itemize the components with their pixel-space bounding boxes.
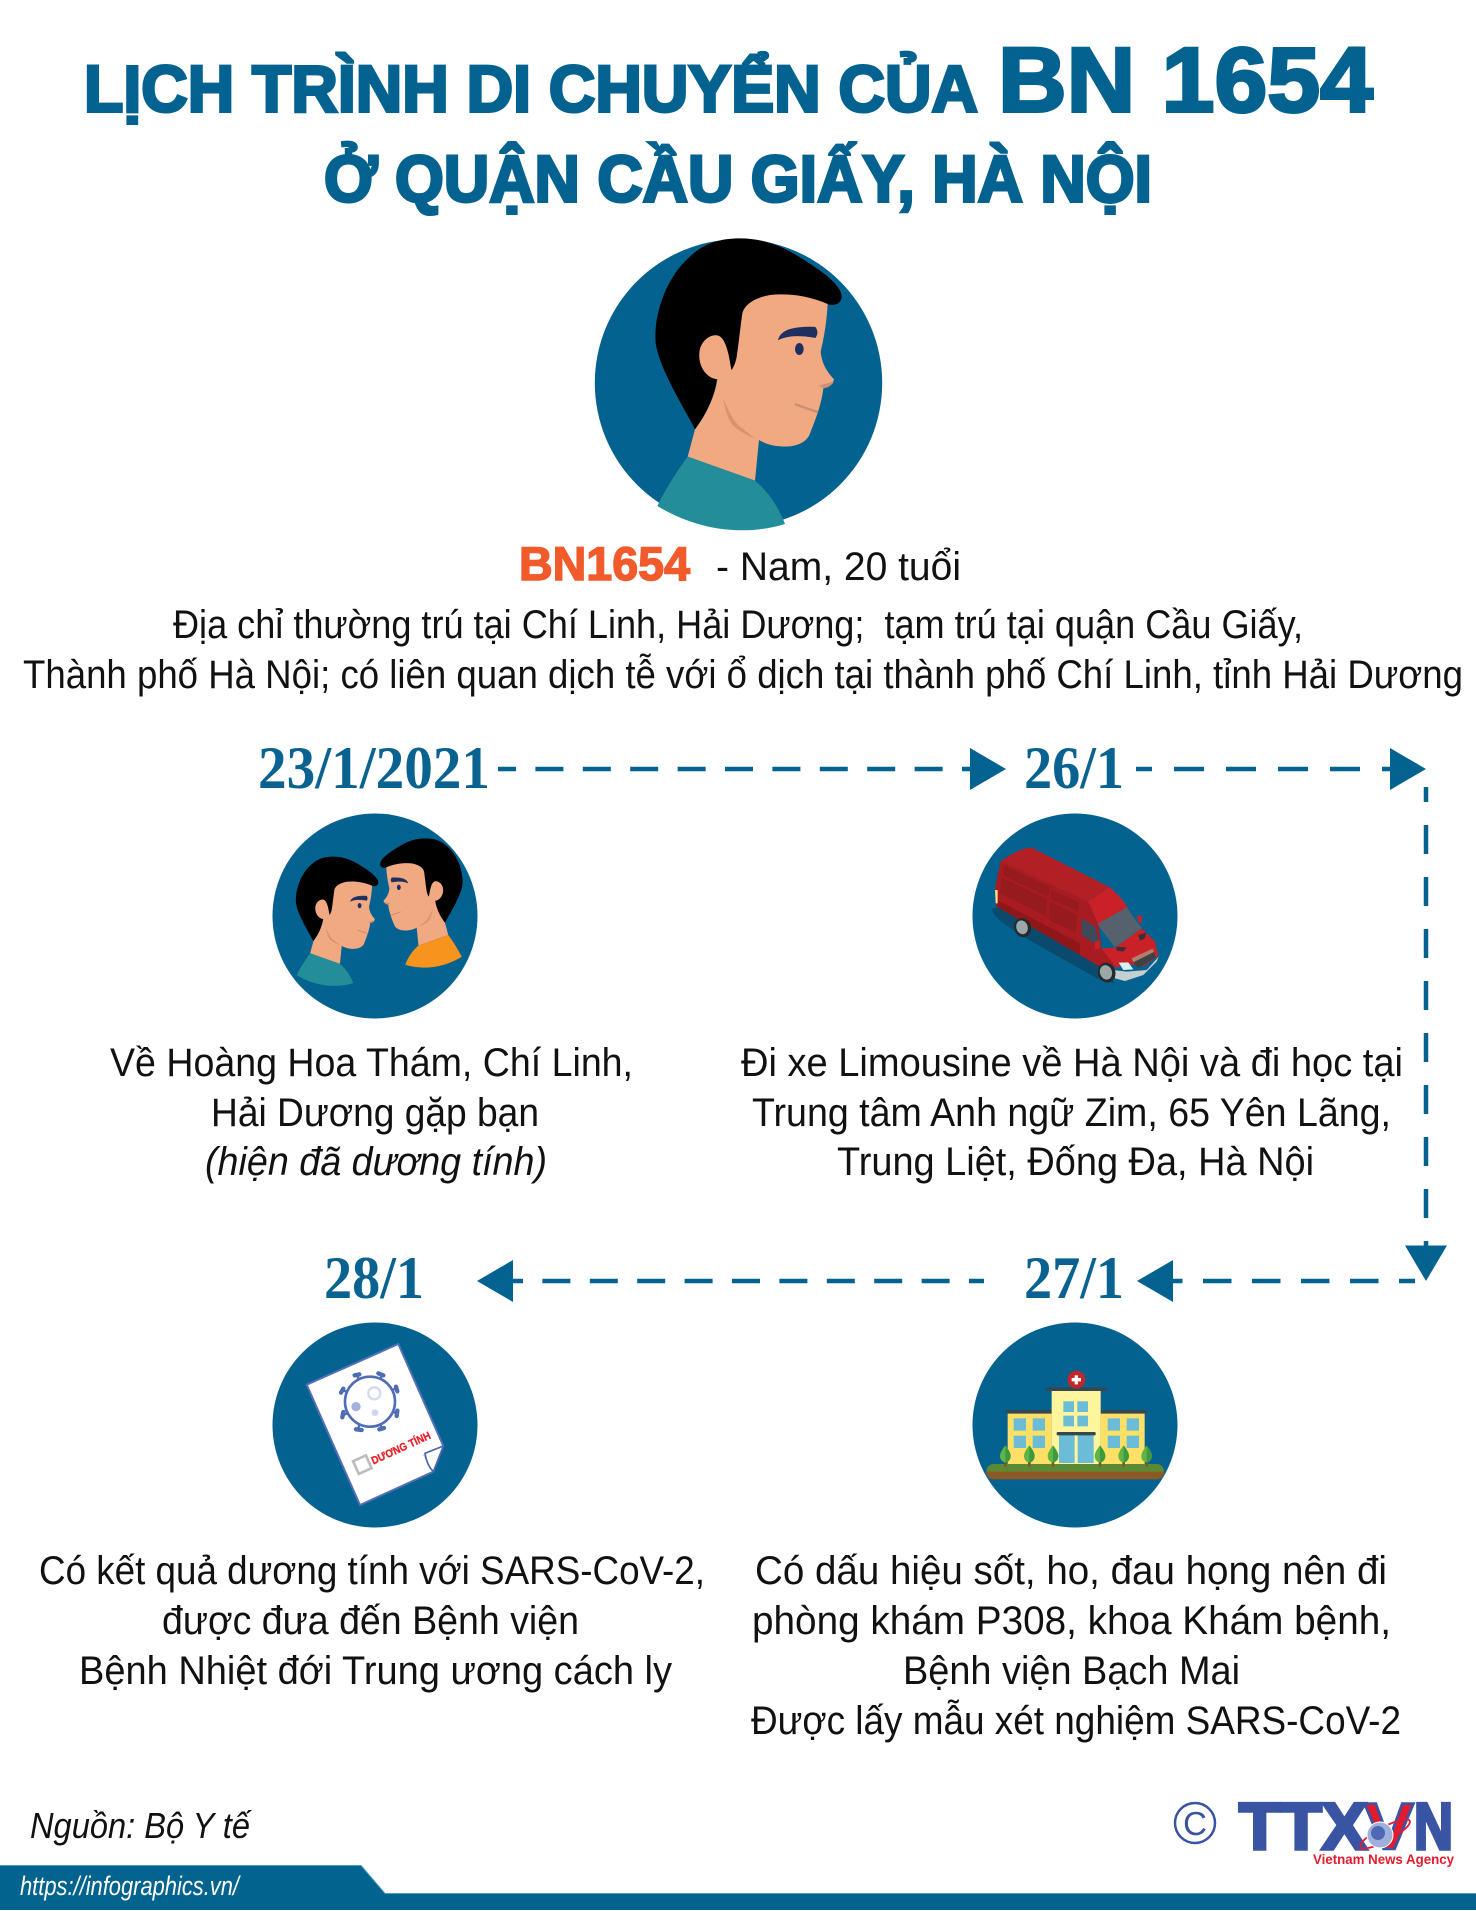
title: [84, 30, 1373, 216]
icon: two friends: [272, 814, 478, 1018]
icon: copyright: C: [1183, 1805, 1207, 1842]
icon: hospital: [972, 1322, 1178, 1528]
date: 26/1: [1024, 735, 1124, 801]
logo tagline: Vietnam News Agency: [1313, 1852, 1454, 1867]
source: Nguồn: Bộ Y tế: [30, 1805, 253, 1846]
step: 26/1: [741, 735, 1403, 1184]
icon: red van: [972, 814, 1178, 1018]
arrow: corner to 27/1: [1137, 1260, 1415, 1302]
title line 1: LỊCH TRÌNH DI CHUYỂN CỦA: [84, 52, 978, 126]
caption: Về Hoàng Hoa Thám, Chí Linh,: [110, 1041, 633, 1085]
logo: TTXVN: [1175, 1789, 1454, 1867]
caption: Trung tâm Anh ngữ Zim, 65 Yên Lãng,: [752, 1091, 1391, 1135]
caption: Bệnh Nhiệt đới Trung ương cách ly: [79, 1649, 672, 1693]
date: 27/1: [1024, 1245, 1124, 1311]
caption: [751, 1549, 1401, 1743]
icon: patient portrait: [595, 238, 882, 530]
arrow: corner down to 27/1 row: [1405, 787, 1447, 1281]
arrow: 27/1 to 28/1: [477, 1260, 984, 1302]
logo wordmark: [1239, 1789, 1453, 1863]
caption: Trung Liệt, Đống Đa, Hà Nội: [837, 1140, 1314, 1184]
arrow: 26/1 to corner: [1136, 748, 1426, 790]
step: 28/1: [39, 1245, 705, 1693]
caption: [39, 1549, 705, 1693]
logo wordmark: TTX: [1239, 1789, 1367, 1863]
footer band: [0, 1865, 1476, 1910]
patient age: - Nam, 20 tuổi: [716, 545, 961, 589]
caption: (hiện đã dương tính): [205, 1140, 547, 1184]
caption: phòng khám P308, khoa Khám bệnh,: [752, 1599, 1391, 1643]
caption: Được lấy mẫu xét nghiệm SARS-CoV-2: [751, 1698, 1401, 1743]
arrow: 23/1 to 26/1: [498, 748, 1006, 790]
step: 27/1: [751, 1245, 1401, 1743]
caption: Đi xe Limousine về Hà Nội và đi học tại: [741, 1041, 1403, 1085]
caption: Bệnh viện Bạch Mai: [903, 1649, 1240, 1693]
patient name: BN1654: [519, 537, 690, 590]
patient description: [23, 537, 1463, 697]
icon: positive test document: [272, 1322, 478, 1528]
icon: positive test document: DƯƠNG TÍNH: [369, 1429, 433, 1467]
logo wordmark: V: [1364, 1789, 1414, 1863]
caption: [741, 1041, 1403, 1184]
icon: copyright: [1175, 1803, 1215, 1843]
title line 2: Ở QUẬN CẦU GIẤY, HÀ NỘI: [324, 142, 1152, 216]
caption: được đưa đến Bệnh viện: [162, 1599, 579, 1643]
title patient code: BN 1654: [998, 30, 1373, 132]
address line 1: Địa chỉ thường trú tại Chí Linh, Hải Dương; tạm trú tại quận Cầu Giấy,: [173, 603, 1303, 647]
footer url: https://infographics.vn/: [20, 1871, 241, 1901]
date: 28/1: [324, 1245, 424, 1311]
logo wordmark: N: [1414, 1789, 1453, 1863]
caption: Có dấu hiệu sốt, ho, đau họng nên đi: [755, 1549, 1387, 1593]
caption: [110, 1041, 633, 1184]
caption: Hải Dương gặp bạn: [211, 1091, 539, 1135]
caption: Có kết quả dương tính với SARS-CoV-2,: [39, 1549, 705, 1593]
date: 23/1/2021: [258, 735, 490, 801]
step: 23/1/2021: [110, 735, 633, 1184]
